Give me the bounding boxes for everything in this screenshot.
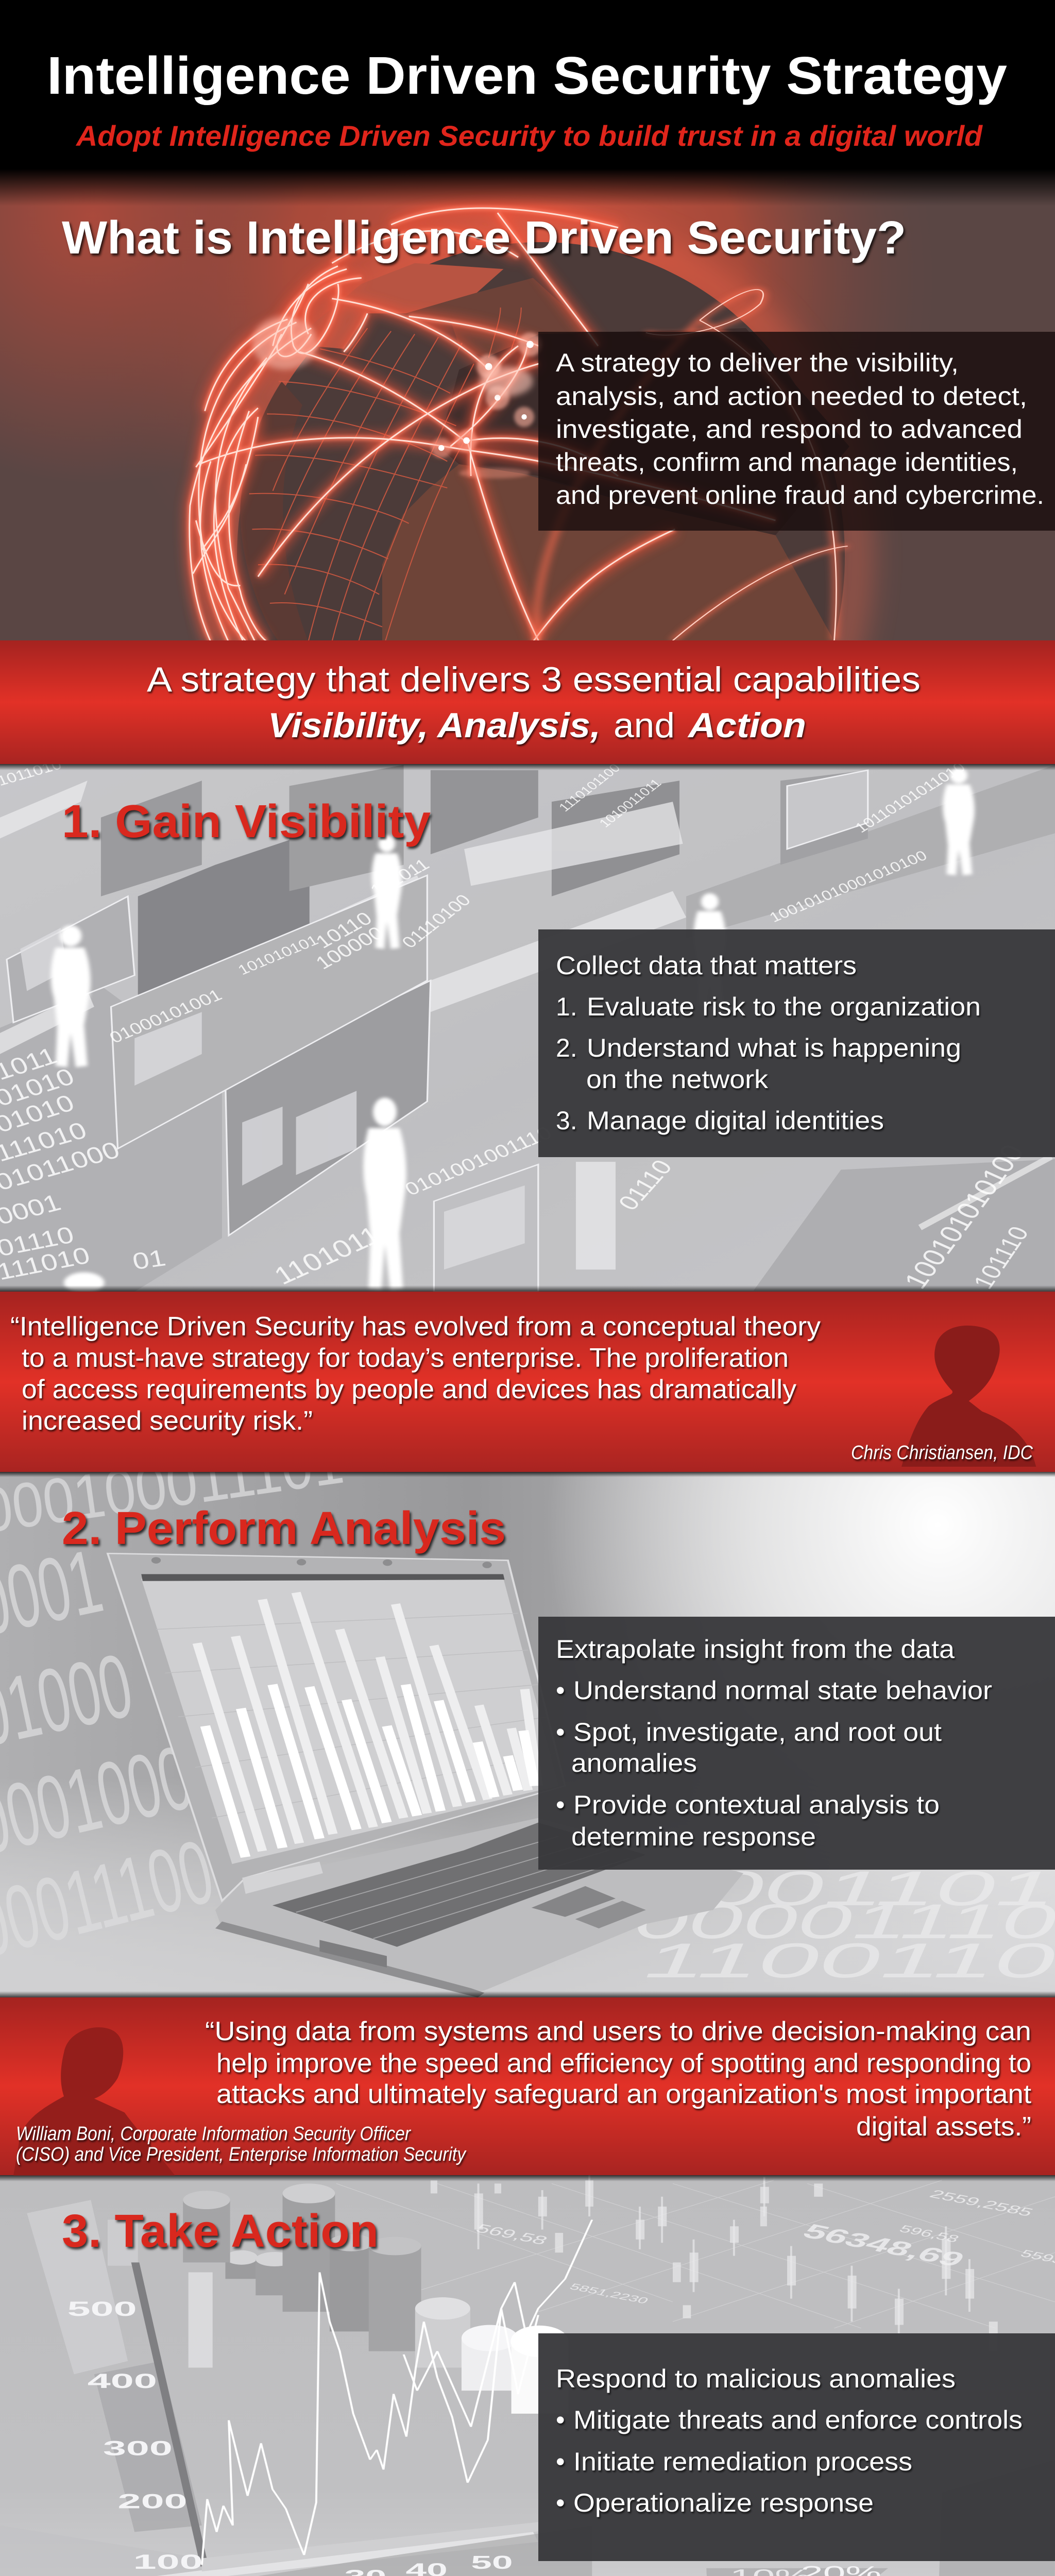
panel: quote 2 William Boni: “Using data from systems and users to drive decision-making can [205,2016,1031,2046]
panel: section 1 gain visibility background: 1010011011 [597,777,665,830]
panel: section 1 gain visibility background: 100101010001010100 [767,848,930,925]
panel: section 1 gain visibility background: 1110101100 [556,761,623,814]
panel: section 3 take action background: 5851,2230 [567,2282,651,2306]
text box: extrapolate insight: Spot, investigate, and root out [573,1718,942,1747]
panel: quote 1 Chris Christiansen: increased security risk.” [22,1406,313,1436]
panel: section 2 perform analysis background: 1100110 [644,1934,1055,1988]
panel: section 2 perform analysis background [0,1425,1055,1997]
icon: laptop with bar chart [108,1553,743,1997]
text box: extrapolate insight: • [556,1718,565,1747]
text box: collect data: 2. [556,1033,577,1062]
silhouettes of people [51,768,975,1293]
attribution: Chris Christiansen, IDC [851,1442,1033,1464]
chart axis labels: 300 [103,2436,173,2460]
panel: section 2 perform analysis background: 1001101 [644,1861,1055,1916]
cylinders [183,2183,569,2414]
text box: definition: A strategy to deliver the visibility, [556,348,959,377]
network hubs [252,316,542,479]
panel: section 1 gain visibility background: 01 [130,1244,168,1275]
text box: collect data [538,929,1055,1157]
text box: definition: analysis, and action needed to detect, [556,382,1027,411]
panel: section 3 take action background: 50 [471,2552,513,2573]
panel: section 1 gain visibility background: 01000101001 [106,986,226,1047]
text box: definition: and prevent online fraud and cybercrime. [556,481,1044,510]
chart axis labels [67,2297,203,2573]
panel: section 1 gain visibility background: 01110100 [398,891,475,952]
title: Intelligence Driven Security Strategy [47,46,1007,105]
text box: collect data: 3. [556,1106,577,1135]
chart axis labels: 200 [118,2490,188,2513]
panel: section 1 gain visibility background: 1101011 [269,1222,386,1290]
silhouette: Chris Christiansen [901,1326,1036,1467]
text box: extrapolate insight: • [556,1790,565,1819]
panel: section 1 gain visibility background: 01110 [612,1156,678,1214]
candlesticks [431,2180,998,2351]
panel: section 1 gain visibility background: 10110101011010 [852,759,969,836]
text box: collect data: Collect data that matters [556,951,857,980]
text box: extrapolate insight [538,1617,1055,1870]
attribution [16,2123,467,2165]
text box: collect data: Understand what is happening [587,1033,961,1062]
header block [0,0,1055,206]
panel: section 1 gain visibility background: 101011 [367,855,433,899]
capabilities line: Action [687,706,806,745]
attribution: William Boni, Corporate Information Security Officer [16,2123,411,2145]
text box: respond: Respond to malicious anomalies [556,2364,956,2393]
text box: definition [538,332,1055,531]
panel: section 1 gain visibility background [0,757,1055,1293]
map grid [249,308,521,641]
text box: respond: Mitigate threats and enforce controls [573,2405,1023,2434]
panel: quote 1 Chris Christiansen: to a must-have strategy for today’s enterprise. The proliferation [22,1343,789,1373]
text box: collect data: 1. [556,992,577,1021]
capabilities line: and [614,706,675,745]
silhouette: William Boni [13,2027,175,2176]
panel: globe hero [0,144,1055,881]
globe illustration [237,242,845,871]
text box: collect data: Evaluate risk to the organization [587,992,981,1021]
heading: take action: 3. Take Action [62,2206,379,2257]
text box: collect data: on the network [586,1065,769,1094]
panel: quote 1 Chris Christiansen: of access requirements by people and devices has dramatically [22,1375,796,1404]
chart axis [131,2262,209,2567]
right-side arcs [537,290,848,640]
large binary digits [0,1425,348,1976]
text box: respond [538,2333,1055,2561]
panel: section 3 take action background: 2559,2585 [926,2188,1036,2219]
band: three capabilities [0,640,1055,770]
chart axis labels: 500 [67,2297,137,2320]
text box: definition: threats, confirm and manage identities, [556,448,1018,477]
heading: what is: What is Intelligence Driven Security? [62,212,906,264]
subtitle: Adopt Intelligence Driven Security to build trust in a digital world [75,120,983,152]
text box: respond: Operationalize response [573,2488,874,2517]
text box: extrapolate insight: Provide contextual analysis to [573,1790,940,1819]
small pie chart [706,2562,930,2576]
text box: respond: Initiate remediation process [573,2447,912,2476]
text box: definition: investigate, and respond to advanced [556,415,1023,444]
capabilities line: Visibility, Analysis, [268,706,601,745]
band: three capabilities: A strategy that delivers 3 essential capabilities [147,660,921,699]
panel: section 1 gain visibility background: 10110 [312,908,377,952]
panel: section 1 gain visibility background: 101110 [967,1223,1034,1293]
text box: extrapolate insight: • [556,1676,565,1705]
panel: quote 2 William Boni: digital assets.” [856,2112,1031,2142]
panel: quote 2 William Boni: attacks and ultimately safeguard an organization's most important [216,2079,1032,2109]
text box: extrapolate insight: Extrapolate insight from the data [556,1635,955,1664]
panel: section 3 take action background: 569,58 [472,2222,551,2247]
panel: section 1 gain visibility background: 101010101 [235,933,321,978]
text box: respond: • [556,2405,565,2434]
panel: section 3 take action background [0,2174,1055,2576]
panel: section 1 gain visibility background: 0101001001110 [401,1123,556,1199]
panel: quote 1 Chris Christiansen [0,1285,1055,1477]
panel: section 1 gain visibility background: 100101010100 [898,1140,1031,1293]
text box: respond: • [556,2447,565,2476]
attribution: (CISO) and Vice President, Enterprise Information Security [16,2144,467,2165]
text box: extrapolate insight: determine response [571,1822,816,1851]
network arcs [190,208,775,641]
panel: section 2 perform analysis background: 00001110 [634,1894,1055,1949]
chart axis labels: 400 [88,2369,157,2393]
white line chart [202,2219,592,2576]
panel: section 3 take action background: 56348,69 [797,2220,970,2271]
heading: gain visibility: 1. Gain Visibility [62,796,431,848]
panel: quote 2 William Boni: help improve the speed and efficiency of spotting and responding to [216,2048,1031,2078]
panel: quote 2 William Boni [0,1991,1055,2181]
text box: respond: • [556,2488,565,2517]
heading: perform analysis: 2. Perform Analysis [62,1503,506,1554]
text box: extrapolate insight: Understand normal state behavior [573,1676,992,1705]
text box: collect data: Manage digital identities [587,1106,884,1135]
text box: extrapolate insight: anomalies [571,1749,697,1777]
panel: section 3 take action background: 596,58 [896,2223,962,2245]
panel: quote 1 Chris Christiansen: “Intelligence Driven Security has evolved from a conceptual theory [10,1312,821,1342]
panel: section 1 gain visibility background: 100000 [312,923,388,973]
capabilities line [268,706,806,745]
chart axis labels: 100 [133,2550,203,2573]
